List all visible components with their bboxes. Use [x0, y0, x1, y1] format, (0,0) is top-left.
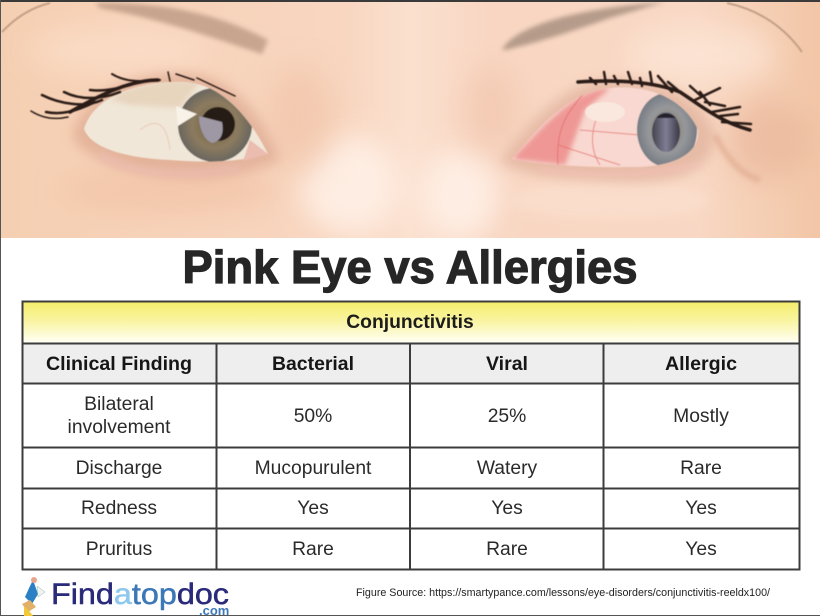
- table banner: [23, 302, 799, 343]
- right brow tail: [727, 3, 802, 52]
- table header row: Viral: [486, 354, 528, 375]
- row: redness: [81, 498, 717, 519]
- left edge line: [0, 0, 1, 616]
- row: bilateral involvement: Mostly: [673, 406, 729, 427]
- table header row: [23, 344, 799, 383]
- right crease: [715, 135, 760, 180]
- logo mascot icon: [22, 577, 45, 616]
- right eyebrow: [502, 2, 665, 50]
- table header row: Bacterial: [272, 354, 354, 375]
- left eye: [31, 72, 280, 178]
- logo: Findatopdoc.com: [22, 577, 229, 616]
- row: bilateral involvement: [68, 394, 729, 438]
- row: pruritus: Rare: [292, 539, 334, 560]
- row: discharge: [76, 458, 722, 479]
- row: pruritus: Pruritus: [86, 539, 152, 560]
- row: pruritus: [86, 539, 717, 560]
- figure source: Figure Source: https://smartypance.com/lessons/eye-disorders/conjunctivitis-reeldx100/: [356, 587, 771, 599]
- row: redness: Yes: [491, 498, 523, 519]
- table background: [22, 301, 800, 570]
- top edge line: [0, 0, 820, 2]
- row: pruritus: Rare: [486, 539, 528, 560]
- row: bilateral involvement: Bilateral: [84, 394, 154, 415]
- row: bilateral involvement: 25%: [488, 406, 526, 427]
- left eyebrow: [95, 3, 268, 54]
- row: pruritus: Yes: [685, 539, 717, 560]
- table header row: Clinical Finding: [46, 354, 192, 375]
- row: discharge: Mucopurulent: [255, 458, 372, 479]
- logo wordmark: Findatopdoc: [51, 578, 229, 611]
- table header row: Allergic: [665, 354, 737, 375]
- photo: woman's eyes, healthy and pink eye: [0, 0, 820, 240]
- row: redness: Yes: [297, 498, 329, 519]
- right eyelashes: [578, 72, 751, 130]
- row: discharge: Discharge: [76, 458, 162, 479]
- row: redness: Redness: [81, 498, 157, 519]
- title: Pink Eye vs Allergies: [182, 241, 638, 293]
- row: bilateral involvement: 50%: [294, 406, 332, 427]
- bottom edge line: [0, 615, 820, 616]
- row: discharge: Watery: [477, 458, 538, 479]
- skin shading around the eyes: [30, 24, 812, 240]
- right lower lid: [540, 164, 700, 174]
- row: discharge: Rare: [680, 458, 722, 479]
- left eyelashes: [31, 72, 235, 118]
- table banner: Conjunctivitis: [346, 312, 474, 333]
- table: conjunctivitis comparison: [22, 301, 800, 570]
- row: redness: Yes: [685, 498, 717, 519]
- left brow tail: [2, 3, 50, 32]
- row: bilateral involvement: involvement: [68, 417, 171, 438]
- table grid: [22, 302, 800, 570]
- right eye: [500, 72, 760, 182]
- left lower lid: [100, 155, 240, 174]
